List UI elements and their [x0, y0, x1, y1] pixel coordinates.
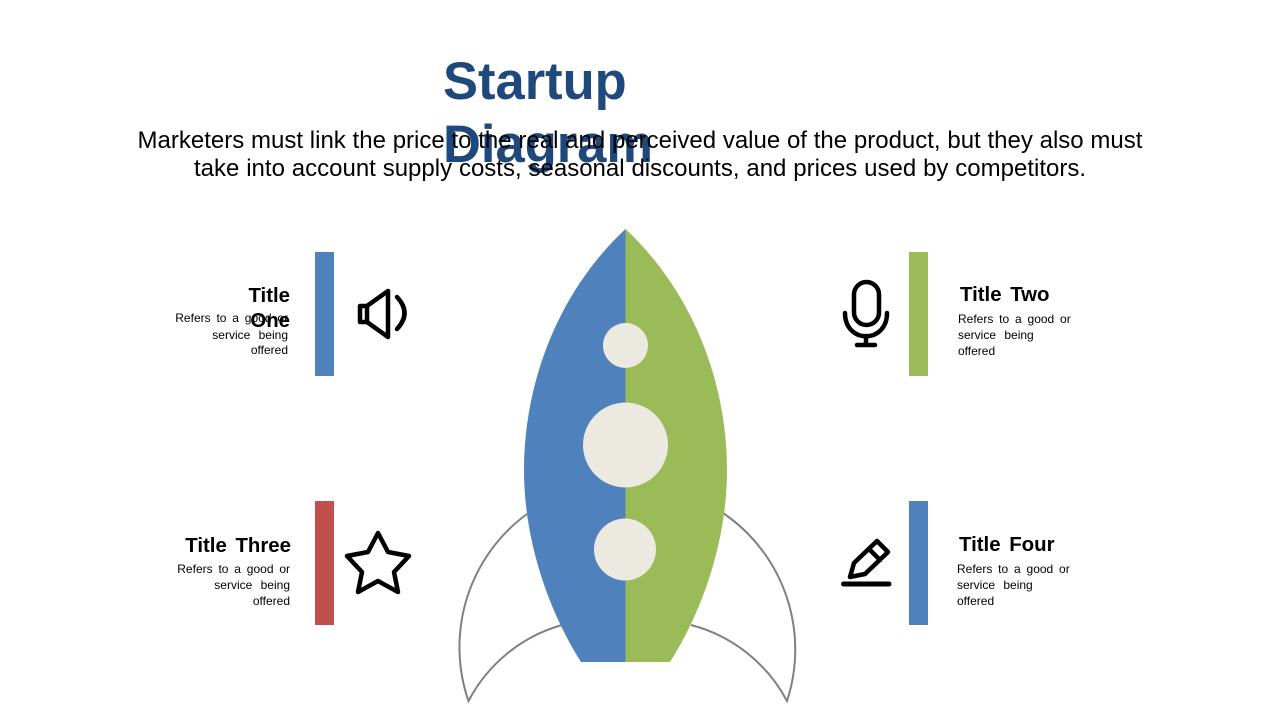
heading: Title Three [185, 535, 291, 557]
panel: title four [844, 501, 1070, 625]
rocket body right half [626, 229, 727, 662]
title: Startup [443, 52, 627, 111]
description: Refers to a good or [177, 562, 290, 576]
description: service being [958, 328, 1034, 342]
description [177, 562, 290, 608]
description: service being [212, 328, 288, 342]
right fin [691, 513, 795, 701]
description: Refers to a good or [957, 562, 1070, 576]
intro paragraph: Marketers must link the price to the real and perceived value of the product, but they also must [138, 127, 1143, 154]
rocket body left half [524, 229, 626, 662]
rocket illustration [459, 229, 795, 701]
bar [315, 252, 334, 376]
description: offered [253, 594, 290, 608]
bar [909, 252, 928, 376]
icon: microphone [845, 282, 887, 345]
middle window [583, 402, 668, 488]
description: offered [958, 344, 995, 358]
description: Refers to a good or [175, 311, 288, 325]
bar [315, 501, 334, 625]
title [443, 52, 653, 174]
heading: Title Two [960, 284, 1049, 306]
description: Refers to a good or [958, 312, 1071, 326]
description [958, 312, 1071, 358]
description [957, 562, 1070, 608]
icon: pen [844, 541, 889, 584]
description [175, 311, 288, 357]
icon: star [347, 533, 409, 592]
panel: title two [845, 252, 1071, 376]
heading: Title [248, 285, 290, 307]
panel: title three [177, 501, 409, 625]
icon: speaker [360, 291, 404, 337]
title: Diagram [443, 115, 653, 174]
description: service being [957, 578, 1033, 592]
panel: title one [175, 252, 404, 376]
heading [248, 285, 290, 332]
description: offered [957, 594, 994, 608]
bottom window [594, 518, 656, 580]
left fin [459, 514, 562, 701]
description: offered [251, 343, 288, 357]
description: service being [214, 578, 290, 592]
intro paragraph: take into account supply costs, seasonal discounts, and prices used by competitors. [194, 155, 1086, 182]
intro paragraph [138, 127, 1143, 182]
heading: One [250, 310, 290, 332]
heading: Title Four [959, 534, 1055, 556]
top window [603, 323, 648, 368]
bar [909, 501, 928, 625]
